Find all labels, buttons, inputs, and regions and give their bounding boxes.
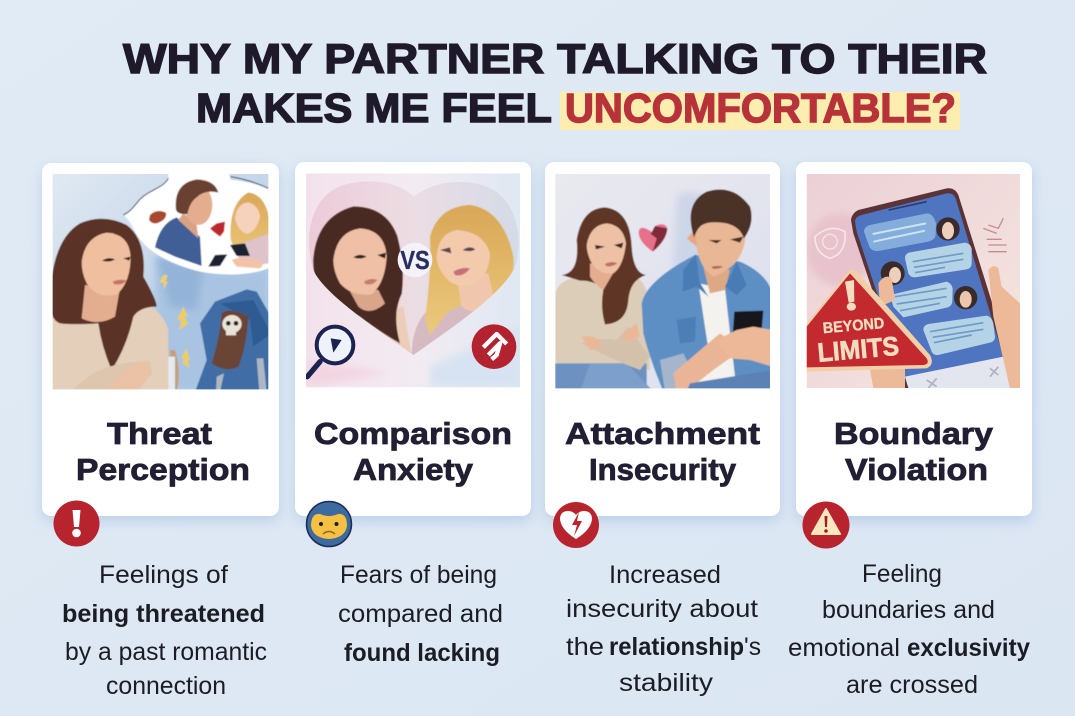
text: boundary violation description: are crossed xyxy=(846,671,978,699)
icon: broken heart badge xyxy=(553,502,599,548)
heading: boundary violation: Boundary xyxy=(834,416,994,451)
heading: attachment insecurity: Insecurity xyxy=(589,452,737,487)
text: boundary violation description: emotional xyxy=(788,634,900,662)
text: threat perception description: being threatened xyxy=(62,600,265,628)
icon: exclamation badge xyxy=(54,500,100,546)
text: attachment insecurity description: insecurity about xyxy=(566,595,758,623)
heading: comparison anxiety xyxy=(314,416,512,487)
text: comparison anxiety description xyxy=(338,561,503,667)
panel: comparison anxiety xyxy=(295,162,531,516)
icon: warning triangle badge xyxy=(802,502,850,548)
text: beyond limits xyxy=(818,318,899,362)
heading: threat perception xyxy=(76,416,250,487)
text: attachment insecurity description: 's xyxy=(744,633,761,661)
text: comparison anxiety description: found lacking xyxy=(344,639,500,667)
text: threat perception description: Feelings of xyxy=(99,561,228,589)
icon: red badge xyxy=(472,324,516,369)
heading: boundary violation xyxy=(834,416,994,487)
icon: magnifying glass xyxy=(307,327,353,377)
heading: threat perception: Perception xyxy=(76,452,250,487)
icon: worried face badge xyxy=(306,502,352,546)
heading: comparison anxiety: Comparison xyxy=(314,416,512,451)
text: attachment insecurity description: stability xyxy=(619,669,714,697)
text: boundary violation description xyxy=(788,560,1030,699)
heading: attachment insecurity xyxy=(565,416,760,487)
heading: comparison anxiety: Anxiety xyxy=(353,452,474,487)
text: attachment insecurity description: the xyxy=(566,633,604,661)
title: WHY MY PARTNER TALKING TO THEIR xyxy=(123,35,987,82)
panel: boundary violation xyxy=(796,162,1032,516)
text: threat perception description: connection xyxy=(106,672,226,700)
illustration: woman imagining partner and ex xyxy=(50,171,271,392)
illustration: phone with messages and warning sign xyxy=(807,174,1020,388)
text: comparison anxiety description: Fears of being xyxy=(340,561,497,589)
heading: threat perception: Threat xyxy=(107,416,212,451)
text: beyond limits: LIMITS xyxy=(816,331,900,368)
panel: threat perception xyxy=(42,163,279,516)
text: boundary violation description: exclusivity xyxy=(907,634,1030,662)
title: MAKES ME FEEL xyxy=(196,85,552,131)
panel: attachment insecurity xyxy=(545,162,780,516)
text: boundary violation description: Feeling xyxy=(862,560,942,588)
text: threat perception description: by a past romantic xyxy=(65,638,267,666)
text: attachment insecurity description: Increased xyxy=(609,561,721,589)
title xyxy=(123,35,987,131)
text: attachment insecurity description: relationship xyxy=(609,633,744,661)
text: beyond limits: BEYOND xyxy=(822,315,885,337)
text: comparison anxiety description: compared and xyxy=(338,600,503,628)
heading: boundary violation: Violation xyxy=(845,452,988,487)
title: UNCOMFORTABLE? xyxy=(565,85,956,131)
heading: attachment insecurity: Attachment xyxy=(565,416,760,451)
text: attachment insecurity description xyxy=(566,561,761,697)
illustration: two women in a heart with VS xyxy=(306,173,520,387)
illustration: woman beside man on phone xyxy=(553,171,773,391)
text: threat perception description xyxy=(62,561,267,700)
text: boundary violation description: boundaries and xyxy=(822,596,995,624)
illustration: two women in a heart with VS: VS xyxy=(400,245,430,275)
